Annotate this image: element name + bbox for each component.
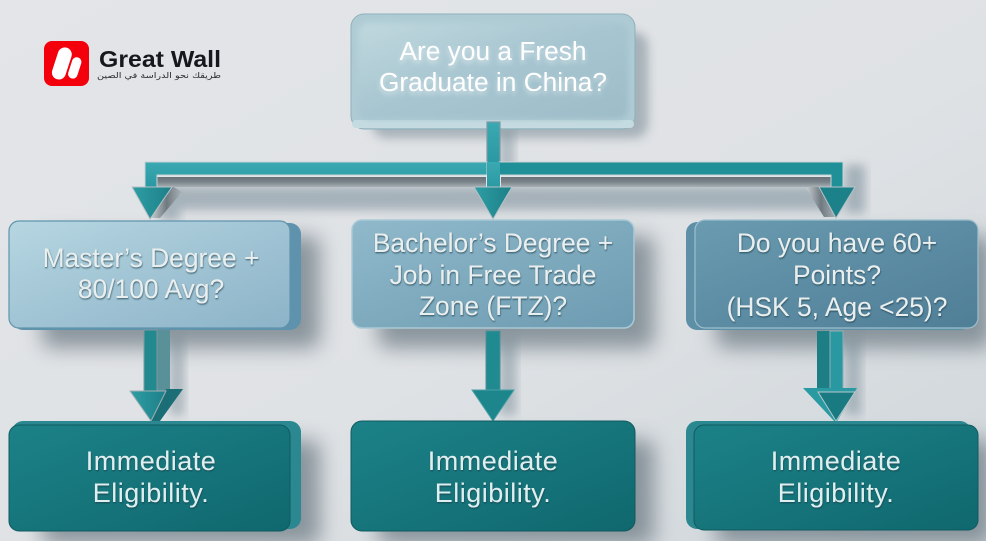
icon: red logo mark bbox=[44, 41, 89, 86]
text: Immediate bbox=[86, 446, 216, 476]
question text bbox=[379, 36, 607, 97]
right arrowhead bbox=[819, 187, 855, 218]
arrow: Bachelor's to result bbox=[472, 331, 516, 421]
question text: Are you a Fresh bbox=[399, 36, 587, 66]
text: Zone (FTZ)? bbox=[419, 291, 567, 321]
left arrow metal side bbox=[151, 186, 182, 218]
left arrowhead bbox=[132, 187, 172, 219]
right arrow metal side bbox=[806, 184, 836, 217]
text bbox=[43, 243, 259, 304]
underside of horizontal bar bbox=[157, 175, 831, 187]
question text: Graduate in China? bbox=[379, 67, 607, 97]
horizontal bar bbox=[145, 162, 487, 187]
logo: Great Wall bbox=[44, 41, 221, 86]
question box: Are you a Fresh Graduate in China? bbox=[351, 14, 648, 138]
connector shadows bbox=[160, 128, 865, 220]
arrow: Master's to result bbox=[130, 330, 184, 421]
text: Job in Free Trade bbox=[390, 260, 596, 290]
text: Immediate bbox=[428, 446, 558, 476]
text: Eligibility. bbox=[778, 478, 894, 508]
text: Do you have 60+ bbox=[737, 228, 937, 258]
panel: result left bbox=[9, 421, 320, 541]
panel: result right bbox=[686, 421, 986, 541]
text bbox=[428, 446, 558, 508]
text: (HSK 5, Age <25)? bbox=[727, 292, 947, 322]
arrow: 60+ Points to result bbox=[803, 331, 861, 423]
brand tagline: طريقك نحو الدراسة في الصين bbox=[97, 71, 221, 80]
panel: Master's Degree bbox=[9, 221, 320, 348]
text: Eligibility. bbox=[435, 478, 551, 508]
panel: Bachelor's Degree bbox=[352, 220, 654, 348]
brand name: Great Wall bbox=[99, 46, 221, 72]
branching connector with three arrows bbox=[132, 122, 855, 219]
text bbox=[373, 228, 613, 321]
text: Points? bbox=[793, 260, 881, 290]
text bbox=[86, 446, 216, 508]
panel: result middle bbox=[351, 421, 654, 541]
panel: Do you have 60+ Points bbox=[686, 220, 986, 348]
text: Eligibility. bbox=[93, 478, 209, 508]
text: 80/100 Avg? bbox=[78, 274, 224, 304]
text bbox=[727, 228, 947, 322]
text: Bachelor’s Degree + bbox=[373, 228, 613, 258]
text: Immediate bbox=[771, 446, 901, 476]
text: Master’s Degree + bbox=[43, 243, 259, 273]
text bbox=[771, 446, 901, 508]
vertical stem bbox=[487, 122, 500, 164]
middle arrowhead bbox=[474, 187, 512, 219]
